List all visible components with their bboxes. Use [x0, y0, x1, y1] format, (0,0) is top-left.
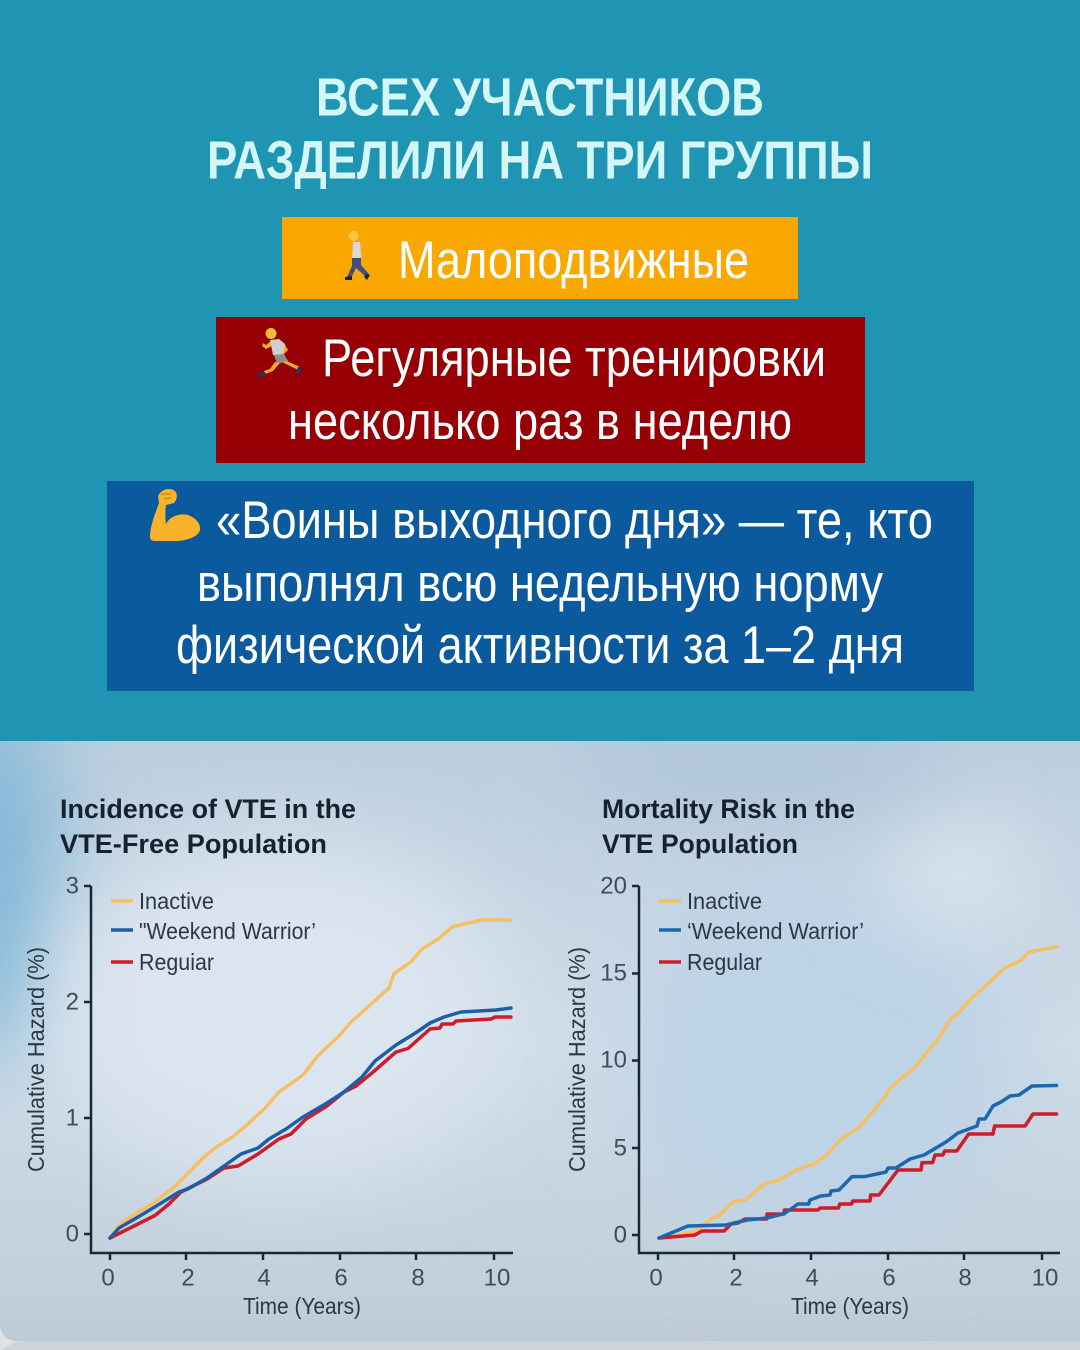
icon: walking person	[345, 231, 370, 280]
x axis numbers: right chart: 8	[958, 1264, 972, 1292]
y axis numbers: right chart	[600, 872, 627, 1248]
legend: right chart: Regular	[687, 949, 762, 975]
x axis numbers: left chart	[101, 1264, 510, 1292]
line: inactive, left chart	[110, 920, 510, 1238]
panel: regular training group: несколько раз в неделю	[288, 392, 792, 451]
panel: regular training group: Регулярные тренировки	[322, 329, 826, 388]
panel: teal header background	[0, 0, 1080, 741]
y axis numbers: left chart: 1	[66, 1104, 79, 1132]
panel: weekend warriors group: физической активности за 1–2 дня	[176, 616, 904, 675]
legend: left chart	[111, 888, 316, 975]
heading: left chart	[60, 794, 356, 859]
chart: incidence of VTE	[23, 794, 513, 1319]
chart: mortality risk	[564, 794, 1060, 1319]
y axis numbers: left chart	[66, 872, 79, 1248]
panel: sedentary group	[282, 217, 798, 299]
axes: right chart	[632, 886, 1060, 1260]
legend: left chart: Reguiar	[139, 949, 214, 975]
x axis numbers: right chart: 4	[805, 1264, 819, 1292]
line: regular, right chart	[659, 1114, 1056, 1238]
panel: weekend warriors group: выполнял всю недельную норму	[197, 554, 883, 613]
legend: right chart: ‘Weekend Warrior’	[687, 918, 864, 944]
line: regular, left chart	[110, 1017, 511, 1238]
heading: right chart: Mortality Risk in the	[602, 794, 855, 824]
y axis numbers: right chart: 0	[614, 1222, 627, 1248]
x axis numbers: left chart: 0	[101, 1264, 115, 1292]
x axis numbers: right chart	[649, 1264, 1058, 1292]
axes: left chart	[84, 886, 513, 1260]
panel: regular training group	[216, 317, 865, 463]
heading: left chart: Incidence of VTE in the	[60, 794, 356, 824]
legend: right chart	[659, 888, 864, 975]
title	[207, 68, 873, 190]
y axis numbers: right chart: 15	[600, 960, 627, 986]
x axis numbers: left chart: 10	[484, 1264, 510, 1292]
y axis numbers: right chart: 5	[614, 1134, 627, 1162]
panel: charts background	[0, 690, 1080, 1350]
legend: left chart: "Weekend Warrior’	[139, 918, 316, 944]
x axis numbers: left chart: 4	[257, 1264, 271, 1292]
heading: right chart: VTE Population	[602, 829, 798, 859]
x axis numbers: left chart: 8	[411, 1264, 425, 1292]
panel: weekend warriors group: «Воины выходного дня» — те, кто	[216, 491, 933, 550]
x axis numbers: right chart: 10	[1032, 1264, 1058, 1292]
title: РАЗДЕЛИЛИ НА ТРИ ГРУППЫ	[207, 130, 873, 190]
x axis title: right chart: Time (Years)	[791, 1293, 909, 1319]
heading: right chart	[602, 794, 855, 859]
title: ВСЕХ УЧАСТНИКОВ	[316, 68, 764, 128]
y axis numbers: left chart: 3	[66, 872, 79, 900]
icon: running person	[257, 328, 302, 377]
icon: flexed biceps	[150, 489, 200, 541]
line: weekend warrior, right chart	[659, 1086, 1056, 1238]
y axis numbers: right chart: 10	[600, 1046, 627, 1074]
x axis title: left chart: Time (Years)	[243, 1293, 361, 1319]
heading: left chart: VTE-Free Population	[60, 829, 327, 859]
panel: weekend warriors group	[107, 481, 974, 691]
x axis numbers: right chart: 6	[882, 1264, 896, 1292]
line: inactive, right chart	[659, 947, 1056, 1238]
y axis title: left chart: Cumulative Hazard (%)	[23, 947, 49, 1172]
legend: left chart: Inactive	[139, 888, 214, 914]
y axis numbers: right chart: 20	[600, 872, 627, 900]
line: weekend warrior, left chart	[110, 1008, 511, 1238]
y axis numbers: left chart: 2	[66, 988, 79, 1016]
x axis numbers: left chart: 6	[334, 1264, 348, 1292]
legend: right chart: Inactive	[687, 888, 762, 914]
x axis numbers: right chart: 0	[649, 1264, 663, 1292]
y axis numbers: left chart: 0	[66, 1220, 79, 1248]
panel: sedentary group: Малоподвижные	[398, 231, 749, 290]
x axis numbers: right chart: 2	[729, 1264, 743, 1292]
x axis numbers: left chart: 2	[181, 1264, 195, 1292]
y axis title: right chart: Cumulative Hazard (%)	[564, 947, 590, 1172]
